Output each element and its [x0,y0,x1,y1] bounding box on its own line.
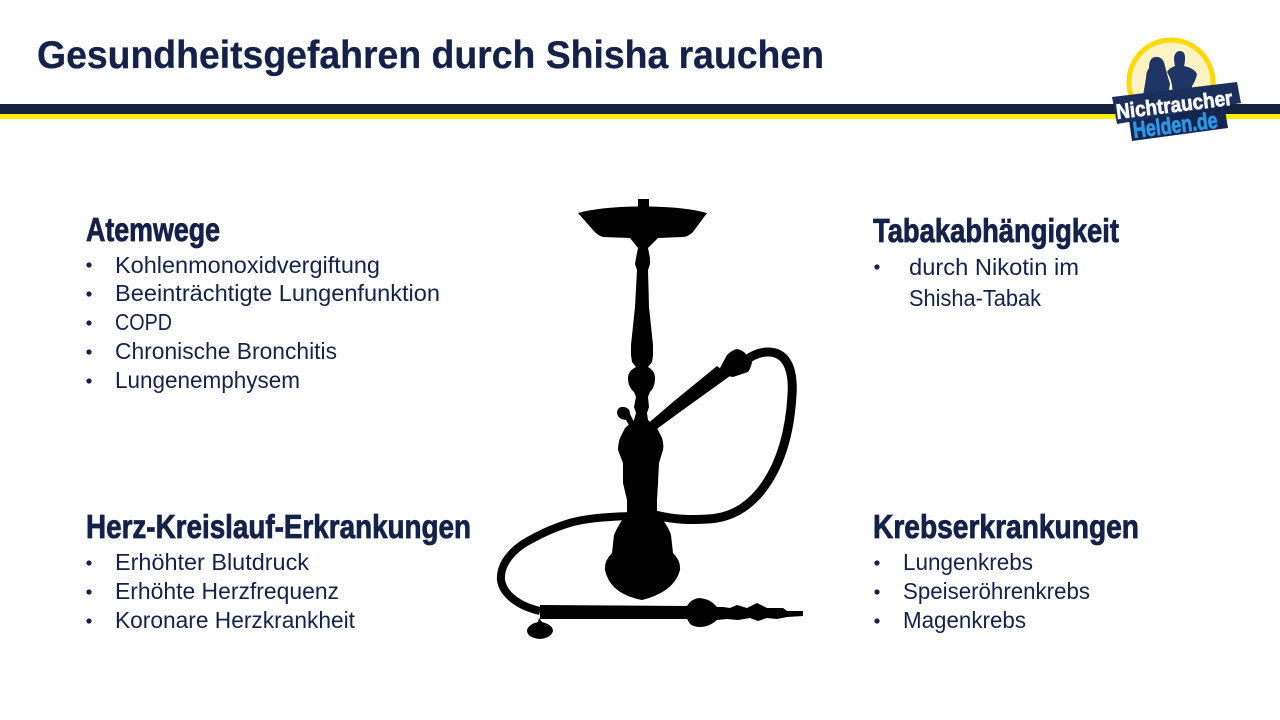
icon: shisha silhouette [501,199,803,639]
panel: Krebserkrankungen [873,508,1139,633]
list: Krebserkrankungen: Speiseröhrenkrebs [903,578,1090,604]
list: Krebserkrankungen: Magenkrebs [903,607,1026,633]
list: Atemwege: Lungenemphysem [115,367,300,393]
title: Gesundheitsgefahren durch Shisha rauchen [37,34,824,77]
list: Tabakabhängigkeit: Shisha-Tabak [909,285,1041,311]
small side knob [617,407,636,430]
panel: Atemwege [86,211,440,393]
panel: Herz-Kreislauf-Erkrankungen [86,508,471,633]
list: Herz-Kreislauf-Erkrankungen: Koronare Herzkrankheit [115,607,356,633]
heading: Atemwege: Atemwege [86,211,220,248]
list: Atemwege: Chronische Bronchitis [115,338,337,364]
list: Atemwege: Kohlenmonoxidvergiftung [115,252,380,278]
icon: two silhouettes [1143,51,1197,96]
right hose [655,352,792,520]
logo banner: Helden.de: Helden.de [1131,107,1219,143]
list: Atemwege [86,252,440,393]
list: Atemwege: COPD [115,309,172,335]
list: Tabakabhängigkeit [874,254,1079,311]
icon: sun circle [1129,40,1213,124]
shisha bowl and stem [578,199,707,600]
mouthpiece [540,598,803,627]
list: Herz-Kreislauf-Erkrankungen: Erhöhter Blutdruck [115,549,310,575]
heading: Tabakabhängigkeit: Tabakabhängigkeit [873,212,1119,249]
list: Krebserkrankungen [874,549,1090,633]
left hose [501,516,630,611]
list: Herz-Kreislauf-Erkrankungen [86,549,356,633]
hose arm [645,366,730,434]
hose connector knob [720,349,752,377]
heading: Herz-Kreislauf-Erkrankungen: Herz-Kreislauf-Erkrankungen [86,508,471,545]
charcoal tip [527,618,553,639]
heading: Krebserkrankungen: Krebserkrankungen [873,508,1139,545]
header rule [0,104,1280,119]
logo: Nichtraucher Helden.de [1112,40,1241,143]
logo banner: Nichtraucher: Nichtraucher [1115,87,1234,124]
list: Tabakabhängigkeit: durch Nikotin im [909,254,1079,280]
list: Atemwege: Beeinträchtigte Lungenfunktion [115,280,440,306]
list: Herz-Kreislauf-Erkrankungen: Erhöhte Herzfrequenz [115,578,339,604]
panel: Tabakabhängigkeit [873,212,1119,311]
list: Krebserkrankungen: Lungenkrebs [903,549,1033,575]
